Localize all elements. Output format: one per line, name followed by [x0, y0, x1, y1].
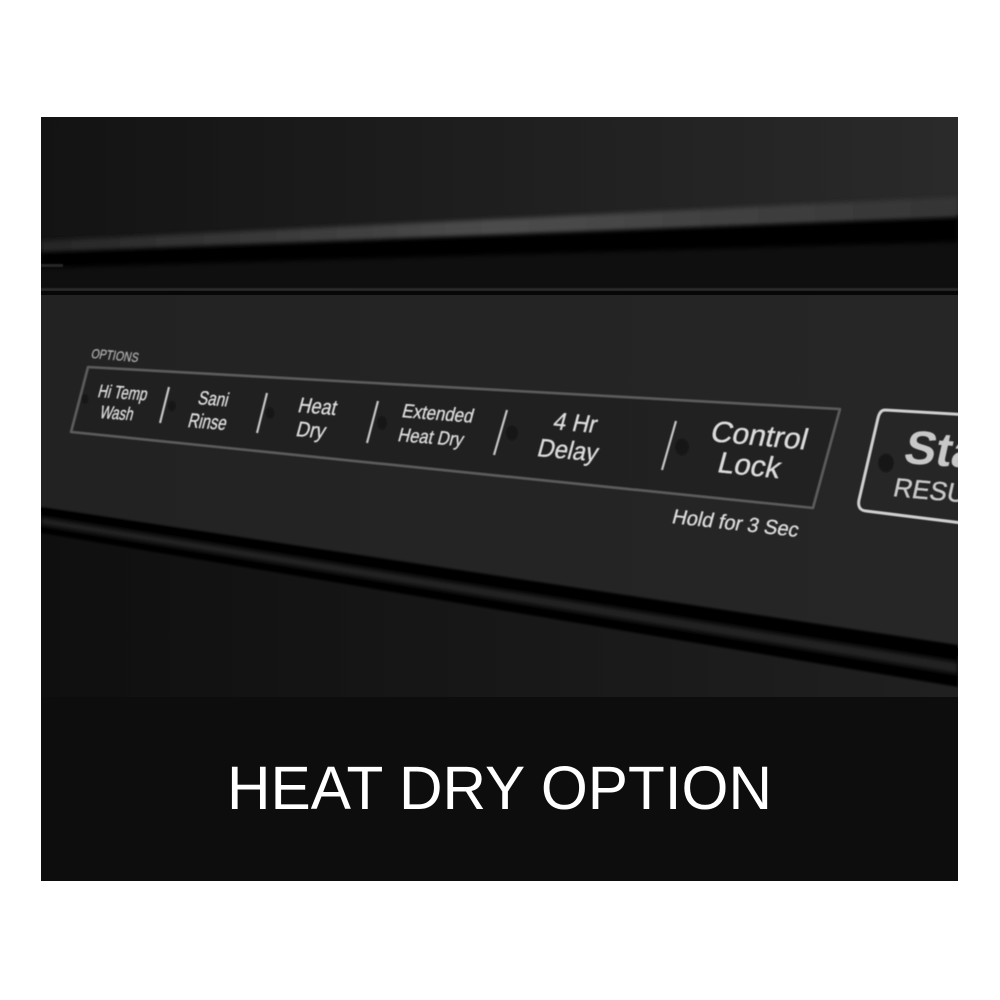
title: HEAT DRY OPTION [227, 754, 772, 822]
option labels: Dry [294, 417, 329, 443]
option labels: Wash [98, 401, 137, 424]
start resume button [856, 408, 958, 525]
option labels: Control [707, 416, 812, 457]
option labels: 4 Hr [550, 408, 601, 439]
caption band [41, 697, 958, 881]
door top rail [41, 197, 958, 300]
option labels: Hi Temp [96, 380, 151, 404]
photo panel: dishwasher control panel [41, 117, 1000, 881]
options label text: OPTIONS [90, 346, 141, 365]
option labels: Sani [196, 387, 232, 411]
option labels [96, 380, 812, 542]
indicator lights [82, 394, 894, 472]
option labels: Heat Dry [396, 424, 467, 451]
option labels: Delay [534, 434, 602, 467]
option labels: Hold for 3 Sec [670, 506, 801, 542]
diagonal door trim rail [41, 507, 958, 687]
option labels: Rinse [186, 410, 230, 435]
option labels: Extended [400, 400, 477, 428]
option labels: Lock [714, 447, 785, 485]
option labels: Heat [296, 393, 340, 420]
control face [41, 295, 958, 300]
options separators [160, 387, 676, 470]
options panel outline [71, 367, 840, 508]
lower door section [41, 532, 418, 697]
